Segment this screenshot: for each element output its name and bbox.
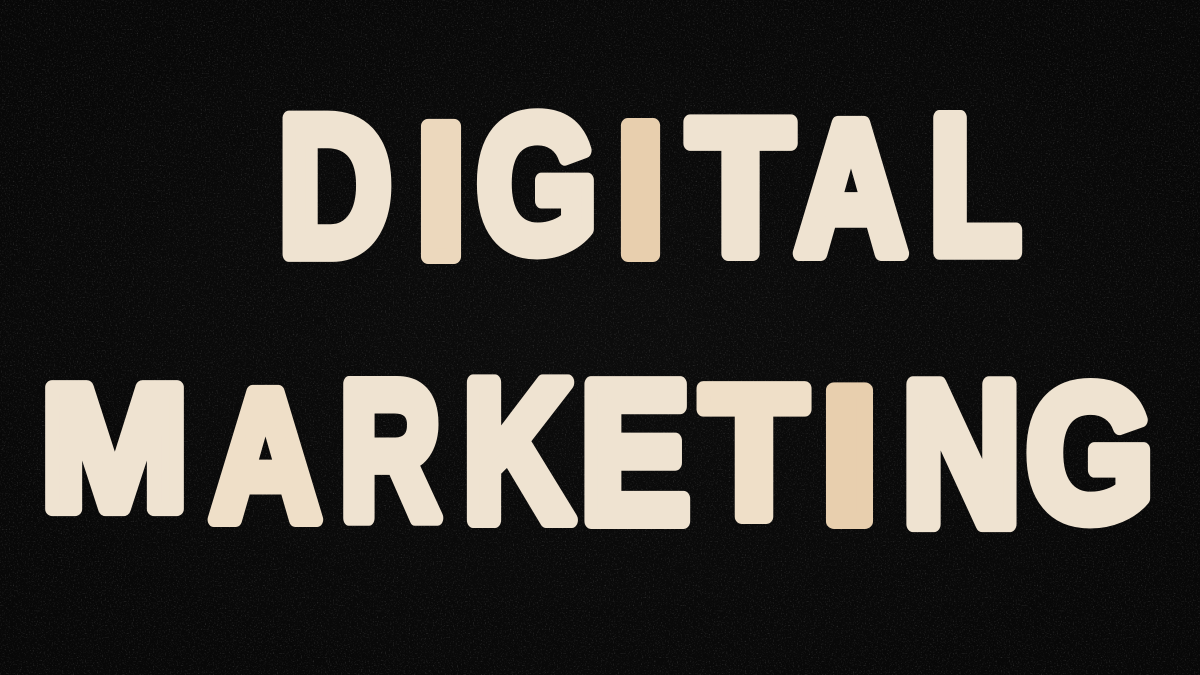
letter A: A bbox=[795, 83, 907, 294]
letter N: N bbox=[902, 342, 1021, 568]
letter E: E bbox=[580, 341, 690, 563]
letter I: I bbox=[616, 86, 665, 295]
letter L: L bbox=[929, 76, 1021, 293]
letter G: G bbox=[1026, 346, 1154, 560]
letter M: M bbox=[40, 348, 189, 547]
heading: MARKETING wooden letters bbox=[40, 339, 1154, 568]
heading: DIGITAL wooden letters bbox=[278, 76, 1021, 297]
letter I: I bbox=[820, 348, 879, 562]
letter T: T bbox=[688, 82, 793, 294]
letter I: I bbox=[416, 86, 466, 297]
letter A: A bbox=[210, 353, 321, 560]
letter R: R bbox=[339, 341, 441, 559]
letter D: D bbox=[278, 76, 392, 296]
letter T: T bbox=[701, 348, 807, 556]
letter K: K bbox=[463, 339, 573, 563]
letter G: G bbox=[477, 76, 597, 291]
